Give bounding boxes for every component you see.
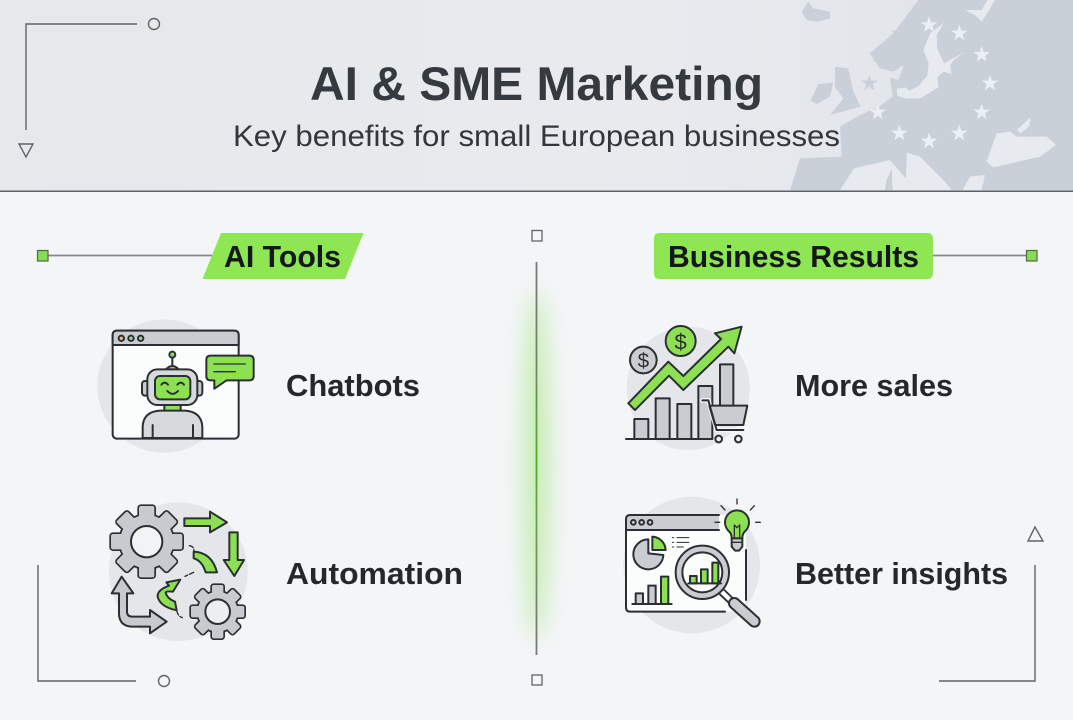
corner decoration: bottom right [939, 527, 1043, 681]
corner decoration: top left [19, 18, 160, 157]
label: Chatbots: Chatbots [286, 368, 420, 403]
title: AI & SME Marketing [310, 57, 763, 110]
header band [0, 0, 1073, 192]
corner decoration: bottom left [38, 565, 170, 686]
map of Europe with stars [790, 0, 1073, 190]
icon: automation gears and arrows [109, 502, 248, 641]
icon: chatbot window [97, 319, 254, 453]
icon: sales chart with cart [626, 326, 750, 450]
heading: AI Tools: AI Tools [224, 239, 341, 274]
label: More sales: More sales [795, 368, 953, 403]
subtitle: Key benefits for small European businesses [233, 120, 840, 153]
heading: Business Results [654, 233, 1037, 279]
heading: AI Tools [38, 233, 364, 279]
glowing centre divider [522, 230, 550, 685]
icon: insights dashboard, magnifier and bulb [623, 497, 760, 633]
icon: sales chart with cart: $ [638, 350, 650, 373]
icon: sales chart with cart: $ [675, 329, 687, 354]
heading: Business Results: Business Results [668, 239, 919, 274]
label: Better insights: Better insights [795, 556, 1008, 591]
label: Automation: Automation [286, 556, 463, 591]
